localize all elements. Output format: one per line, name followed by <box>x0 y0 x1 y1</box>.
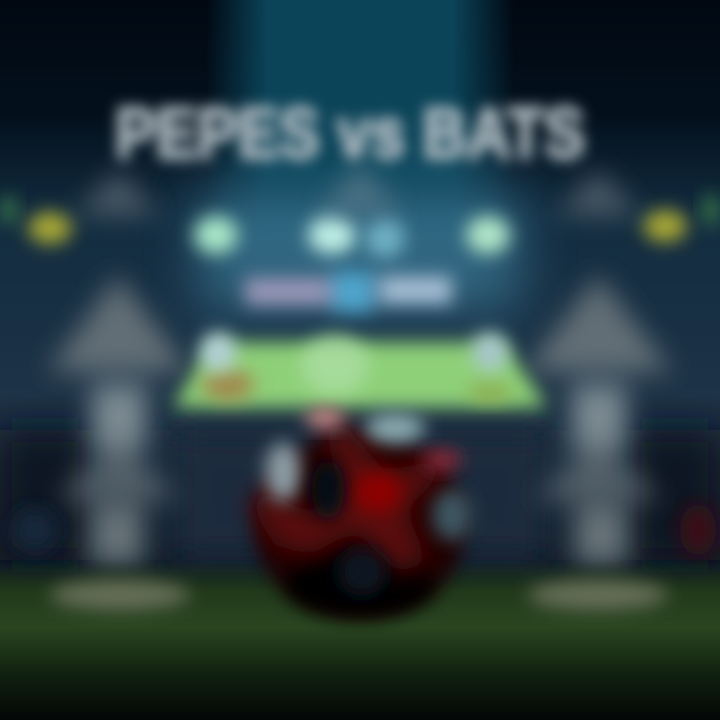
pitch <box>172 332 548 408</box>
left tower <box>48 170 190 565</box>
soccer ball <box>250 408 472 617</box>
center tower <box>320 160 400 215</box>
floodlights row <box>1 194 719 258</box>
right tower <box>524 170 672 565</box>
title: PEPES vs BATS <box>115 94 585 174</box>
ground grass <box>0 504 720 720</box>
background <box>0 0 720 572</box>
banner <box>245 272 452 312</box>
